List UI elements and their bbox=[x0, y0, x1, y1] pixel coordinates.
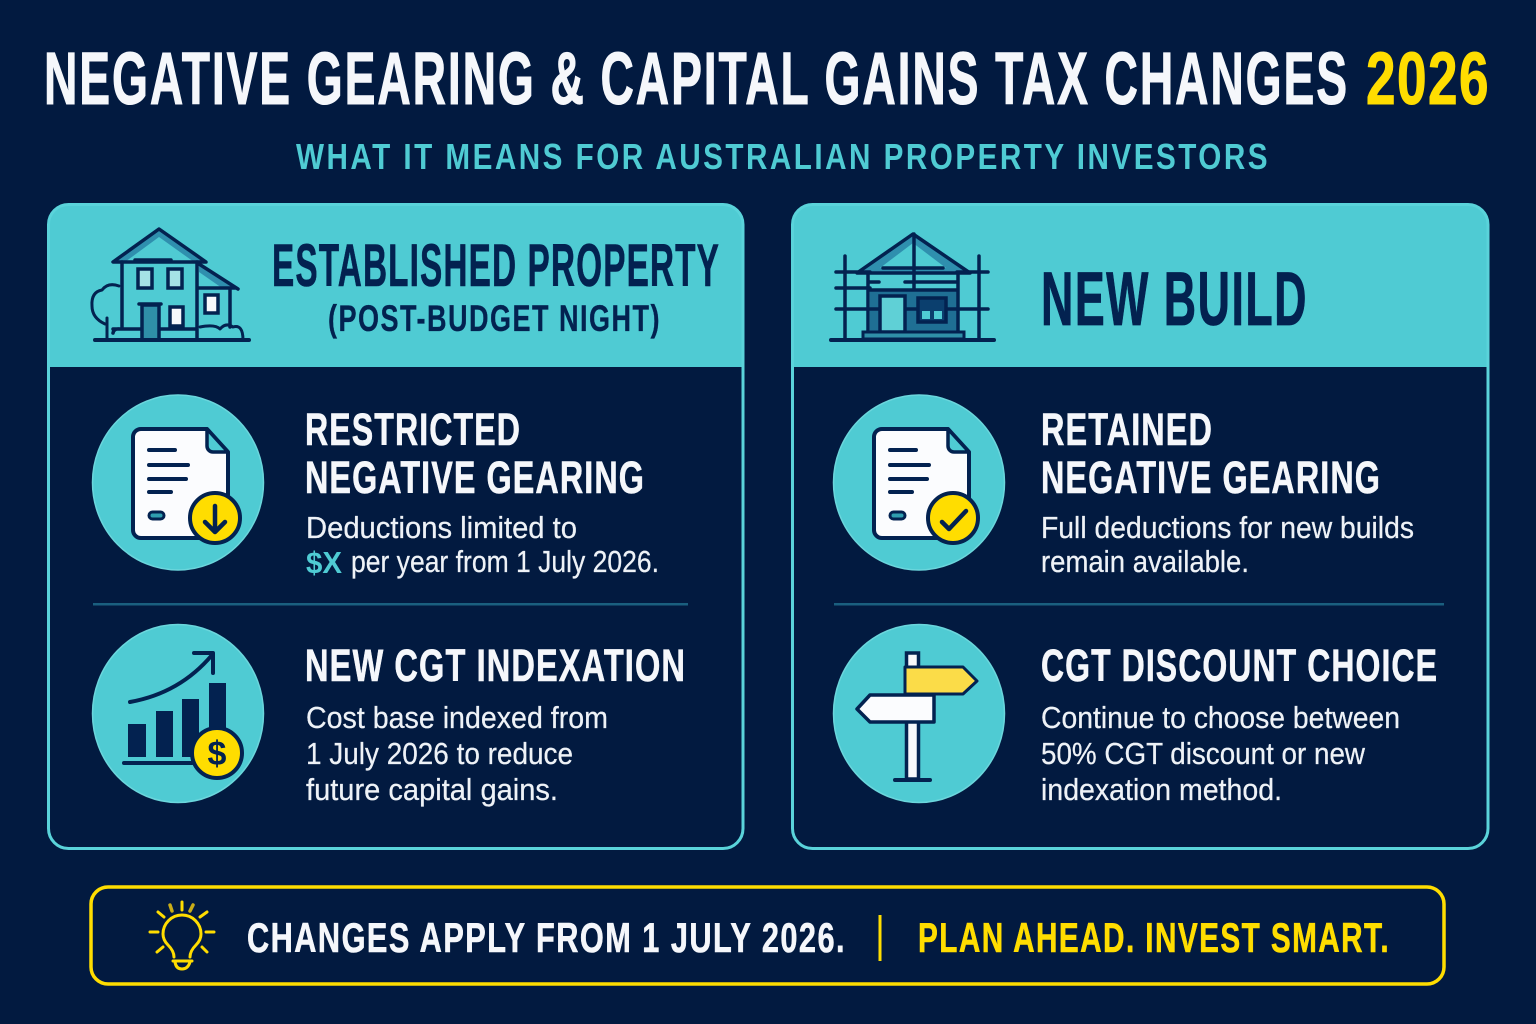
icon: document with down arrow bbox=[92, 395, 264, 570]
subtitle: WHAT IT MEANS FOR AUSTRALIAN PROPERTY INVESTORS bbox=[296, 136, 1270, 177]
card body: cgt discount choice bbox=[1041, 700, 1400, 807]
card heading: retained negative gearing: RETAINED bbox=[1041, 404, 1213, 455]
panel heading: established property: ESTABLISHED PROPERTY bbox=[272, 232, 720, 299]
callout: footer banner bbox=[91, 887, 1444, 984]
icon: document with check bbox=[834, 395, 1004, 570]
card body: new cgt indexation: future capital gains. bbox=[306, 772, 558, 807]
card body: restricted negative gearing: Deductions limited to bbox=[306, 510, 577, 545]
panel subheading: post-budget night: (POST-BUDGET NIGHT) bbox=[328, 298, 661, 339]
card body: new cgt indexation: 1 July 2026 to reduce bbox=[306, 736, 573, 771]
card body: cgt discount choice: Continue to choose between bbox=[1041, 700, 1400, 735]
panel header background: new build bbox=[792, 204, 1488, 367]
footer statement: CHANGES APPLY FROM 1 JULY 2026. bbox=[247, 914, 846, 961]
icon: bar chart with dollar bbox=[92, 624, 264, 802]
card body: cgt discount choice: 50% CGT discount or new bbox=[1041, 736, 1366, 771]
card body: restricted negative gearing: $X bbox=[306, 545, 342, 580]
title: 2026 bbox=[1366, 37, 1490, 120]
panel: new build bbox=[792, 204, 1488, 848]
card body: new cgt indexation: Cost base indexed from bbox=[306, 700, 608, 735]
card heading: retained negative gearing: NEGATIVE GEARING bbox=[1041, 452, 1381, 503]
card body: retained negative gearing bbox=[1041, 510, 1414, 579]
panel heading: new build: NEW BUILD bbox=[1041, 257, 1308, 342]
card heading: restricted negative gearing: NEGATIVE GEARING bbox=[305, 452, 645, 503]
panel header background: established property bbox=[48, 204, 743, 367]
card heading: restricted negative gearing: RESTRICTED bbox=[305, 404, 521, 455]
panel: established property bbox=[48, 204, 743, 848]
icon: house bbox=[92, 229, 249, 340]
card heading: restricted negative gearing bbox=[305, 404, 645, 503]
card body: new cgt indexation bbox=[306, 700, 608, 807]
card body: restricted negative gearing: per year from 1 July 2026. bbox=[351, 544, 659, 579]
icon: house under construction bbox=[831, 234, 994, 340]
icon: light bulb bbox=[150, 902, 214, 969]
icon: bar chart with dollar: $ bbox=[208, 735, 227, 773]
card body: restricted negative gearing bbox=[306, 510, 659, 580]
card body: cgt discount choice: indexation method. bbox=[1041, 772, 1282, 807]
card heading: retained negative gearing bbox=[1041, 404, 1381, 503]
card body: retained negative gearing: Full deductions for new builds bbox=[1041, 510, 1414, 545]
icon: signpost bbox=[834, 624, 1004, 802]
card heading: new cgt indexation: NEW CGT INDEXATION bbox=[305, 640, 686, 691]
card body: retained negative gearing: remain available. bbox=[1041, 544, 1249, 579]
